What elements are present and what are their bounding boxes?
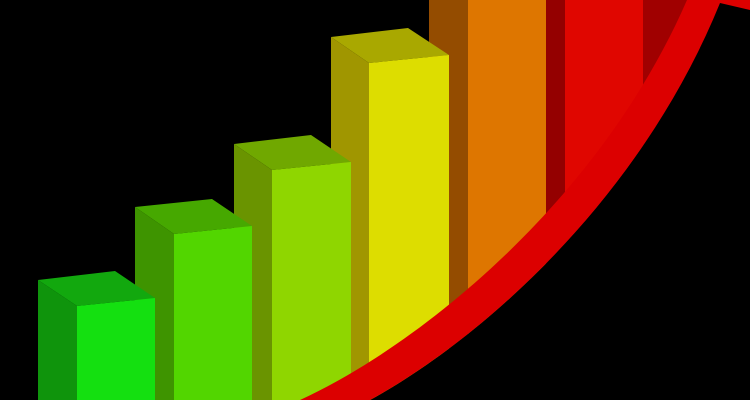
bar 2: green: [135, 199, 252, 400]
arrow: red curved band: [300, 0, 750, 400]
bar 6: red: [546, 0, 700, 400]
bar 4: yellow: [331, 28, 449, 400]
bar 1: bright green: [38, 271, 155, 400]
bar 5: orange: [429, 0, 546, 400]
black area below arrow: [370, 0, 750, 400]
bar 3: yellow-green: [234, 135, 351, 400]
